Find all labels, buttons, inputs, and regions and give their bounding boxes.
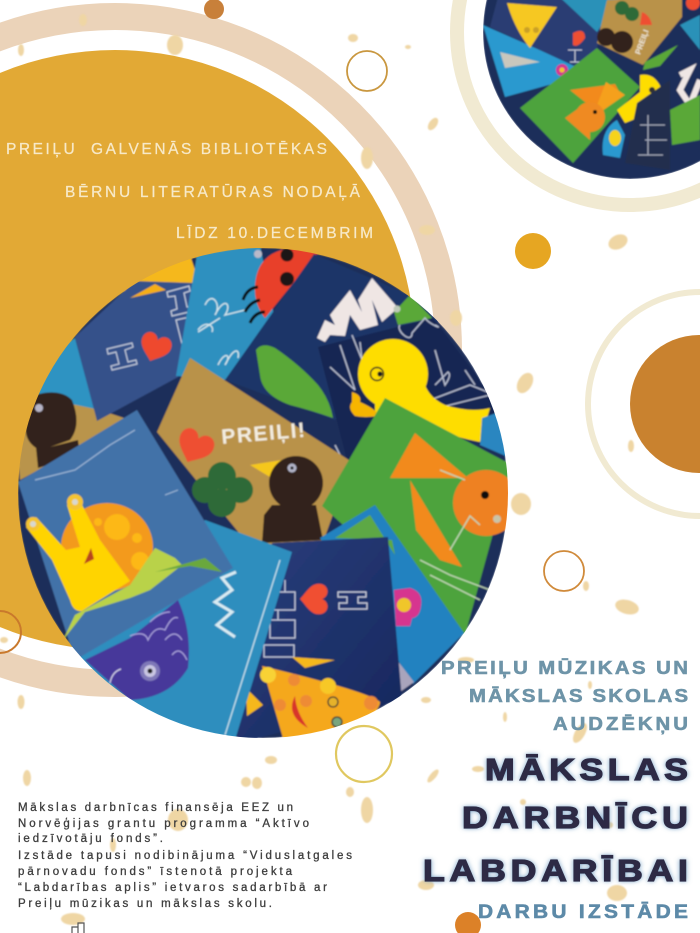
- ladybug: [243, 248, 320, 323]
- funding text block: “Labdarības aplis” ietvaros sadarbībā ar: [18, 882, 327, 894]
- library location text: LĪDZ 10.DECEMBRIM: [176, 225, 373, 242]
- funding text block: [18, 802, 352, 910]
- light blue card left: [38, 338, 94, 410]
- teal card: [562, 0, 618, 32]
- main title: LABDARĪBAI: [423, 854, 688, 888]
- partial logo at bottom edge: [72, 923, 84, 933]
- green fox card: [520, 48, 640, 163]
- yellow fish bottom: [246, 657, 380, 745]
- yellow card top: [124, 258, 196, 292]
- teal card with plant: [176, 245, 275, 380]
- orange dot bottom: [455, 912, 481, 933]
- gold circle: [0, 50, 415, 650]
- library location text: [6, 141, 373, 242]
- small ring right: [544, 551, 584, 591]
- teal card with purple fish: [70, 520, 292, 750]
- main title: DARBNĪCU: [462, 801, 688, 835]
- small ring top: [347, 51, 387, 91]
- green card with orange fox: [322, 398, 519, 635]
- right orange circle: [630, 335, 700, 473]
- yellow ring bottom: [336, 726, 392, 782]
- navy card with fish: [490, 0, 601, 67]
- funding text block: Preiļu mūzikas un mākslas skolu.: [18, 898, 272, 910]
- main title: [423, 753, 688, 888]
- subheading: school: AUDZĒKŅU: [553, 714, 688, 735]
- grey note and flower: [500, 52, 568, 76]
- navy card with zigzag and leaf: [225, 254, 440, 420]
- yellow duck and dark card: [617, 75, 670, 170]
- library location text: BĒRNU LITERATŪRAS NODAĻĀ: [65, 184, 361, 201]
- beige ring around gold circle: [0, 16, 448, 684]
- funding text block: Norvēģijas grantu programma “Aktīvo: [18, 817, 309, 830]
- blue card with flower: [320, 505, 464, 692]
- right pale ring: [588, 292, 700, 516]
- subheading: school: MĀKSLAS SKOLAS: [469, 686, 688, 707]
- blue heart card: [75, 281, 195, 421]
- main circular photo of hand-made cards: [15, 245, 519, 750]
- left orange ring: [0, 611, 21, 653]
- tan PREILI card: PREIĻI!: [220, 419, 307, 449]
- funding text block: pārnovadu fonds” īstenotā projekta: [18, 866, 293, 878]
- library location text: PREIĻU GALVENĀS BIBLIOTĒKAS: [6, 141, 327, 158]
- subheading: school: [441, 658, 688, 735]
- funding text block: Izstāde tapusi nodibinājuma “Viduslatgales: [18, 850, 352, 862]
- funding text block: iedzīvotāju fonds”.: [18, 833, 163, 845]
- subheading: exhibition: DARBU IZSTĀDE: [478, 902, 688, 923]
- tan card with brown bird: [15, 392, 130, 480]
- light blue card: [483, 24, 574, 98]
- top right pale ring: [457, 0, 700, 205]
- blue snail card: [18, 410, 233, 660]
- dark duck card: [318, 316, 495, 458]
- tan card: [597, 0, 682, 65]
- tan PREILI card: [157, 358, 352, 545]
- tan card: PREIĻI: [633, 28, 651, 56]
- navy card with heart: [232, 537, 402, 745]
- top right circular photo of cards: [483, 0, 700, 179]
- funding text block: Mākslas darbnīcas finansēja EEZ un: [18, 802, 293, 814]
- subheading: school: PREIĻU MŪZIKAS UN: [441, 658, 688, 679]
- blue shape with small bird: [603, 120, 625, 158]
- main title: MĀKSLAS: [485, 753, 688, 787]
- blue corner: [478, 412, 506, 457]
- yellow dot: [515, 233, 551, 269]
- white zigzag, green shapes and red heart: [643, 0, 700, 145]
- small orange dot top: [204, 0, 224, 19]
